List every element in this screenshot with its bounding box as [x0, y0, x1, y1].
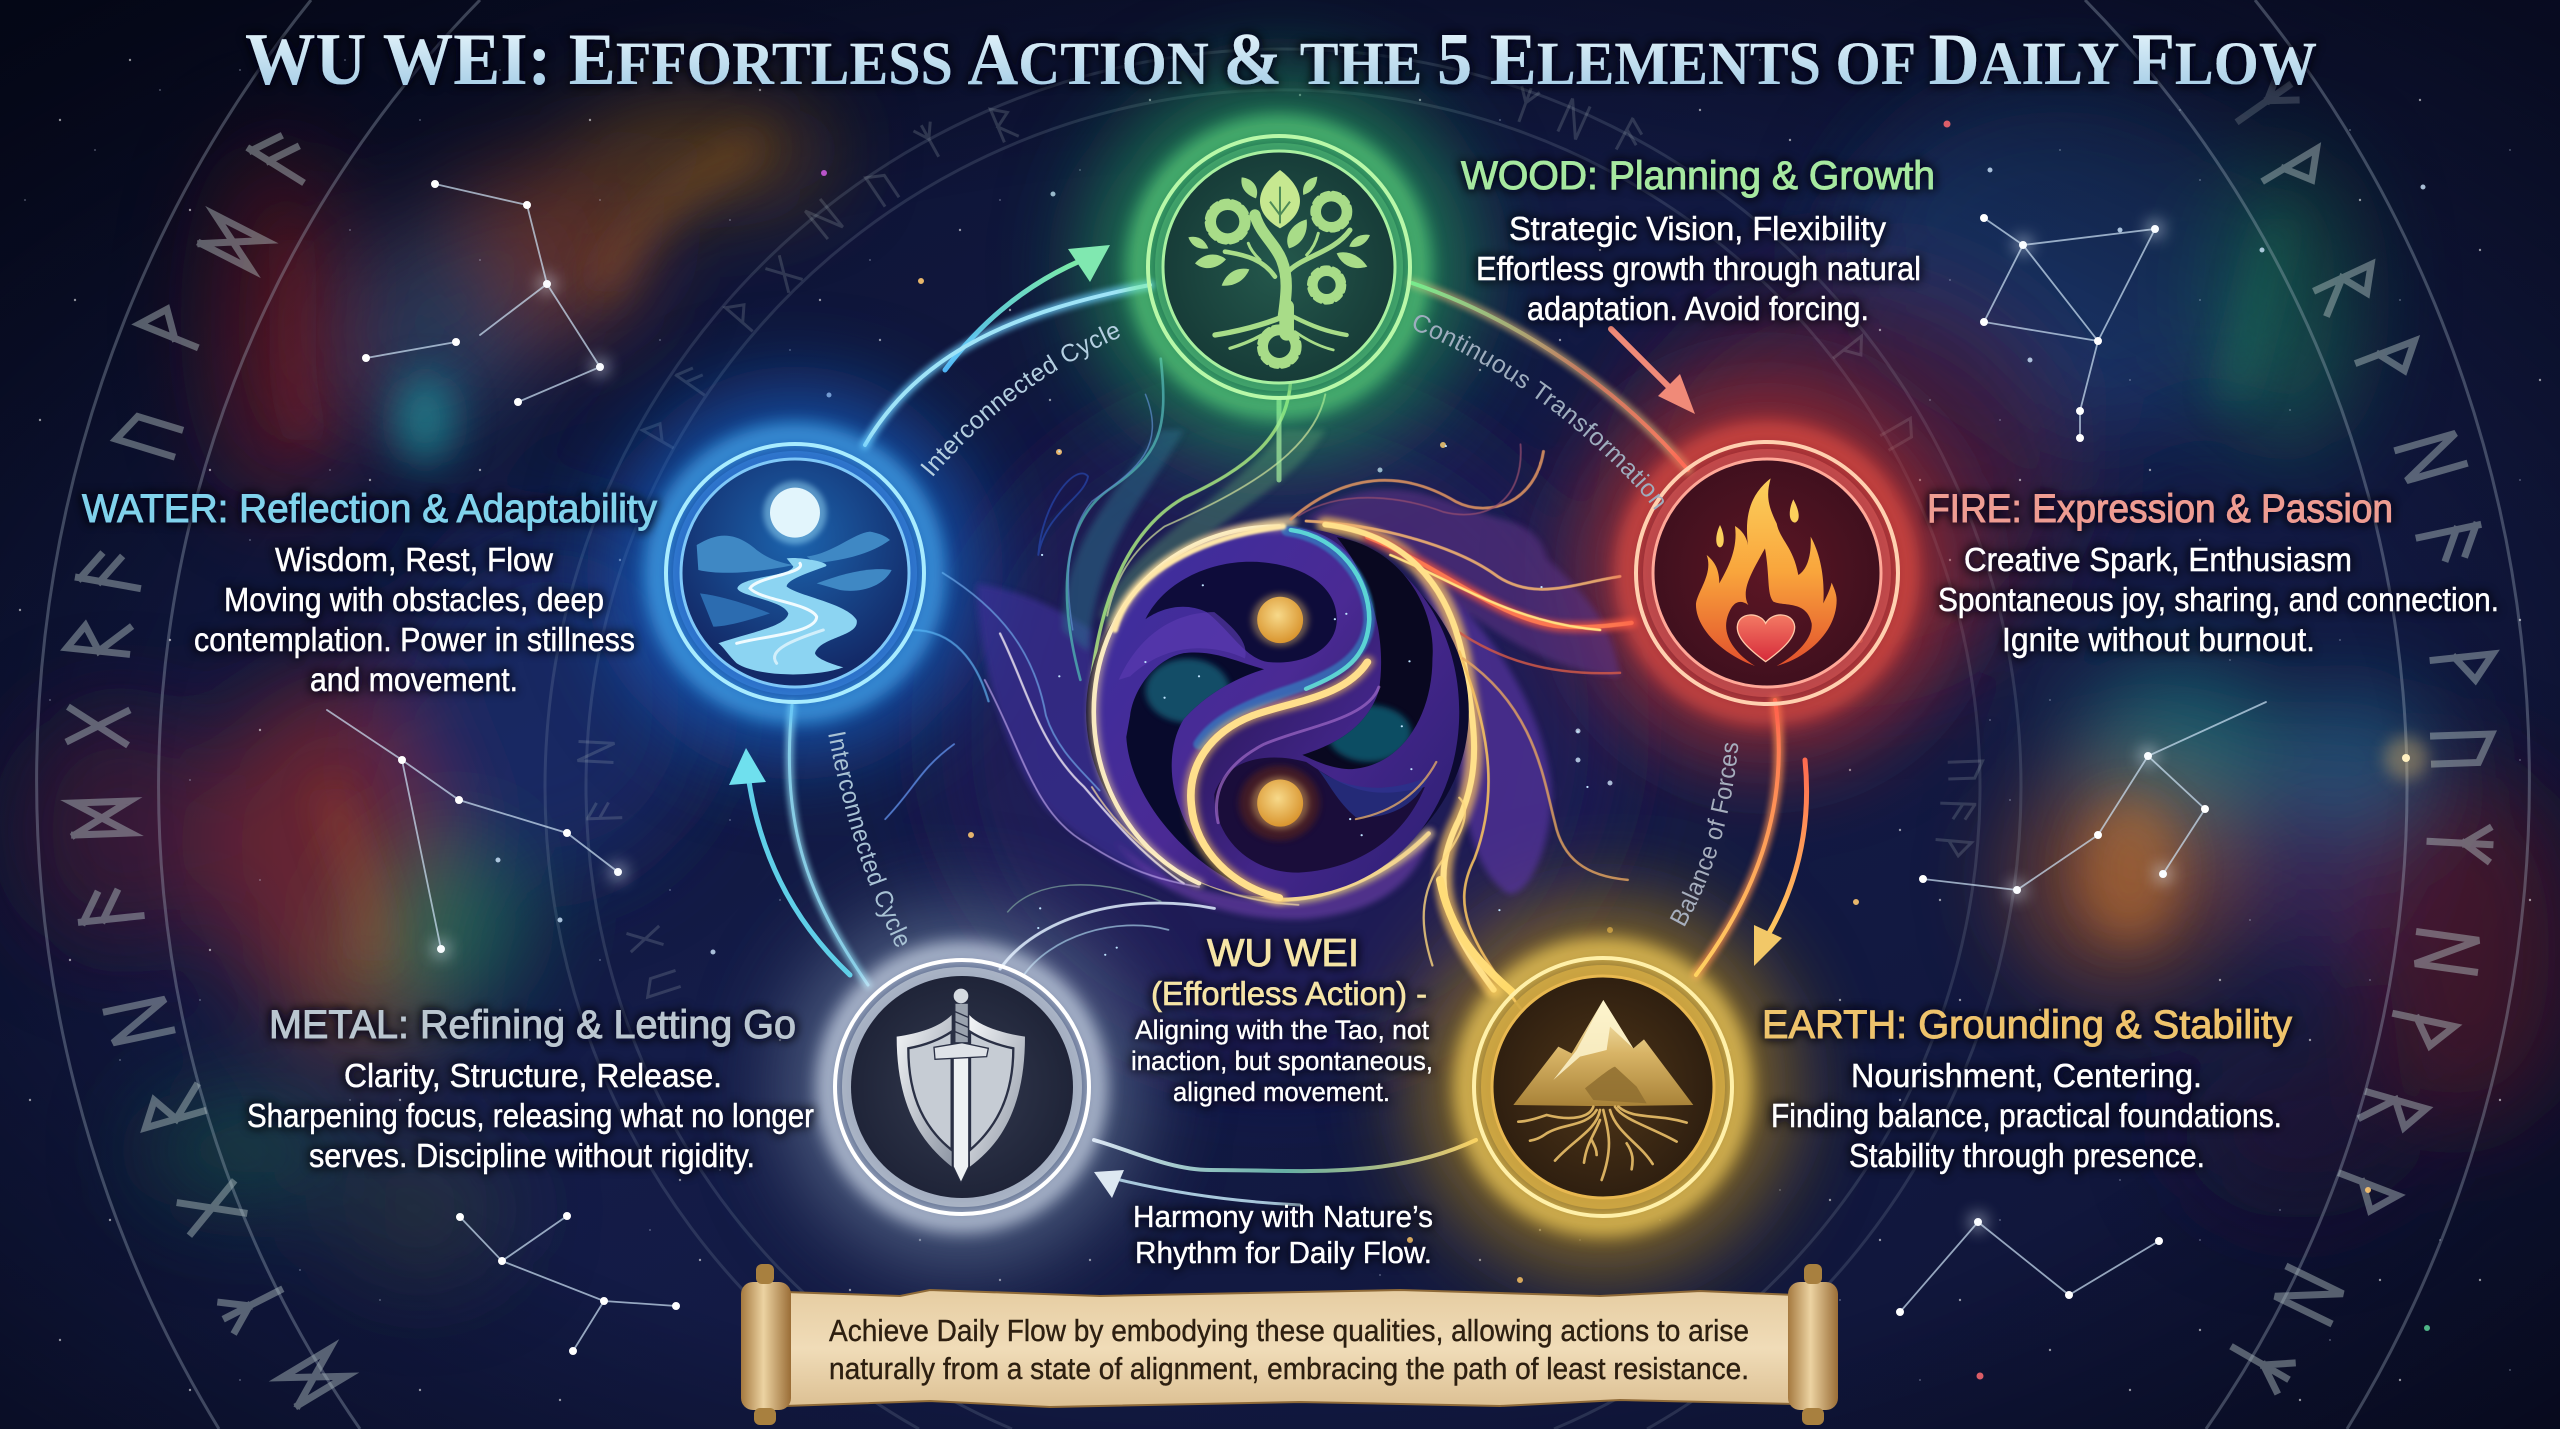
icon: tree with gears [1188, 170, 1370, 367]
dark space in left lobe [1126, 652, 1264, 887]
panel: metal: Sharpening focus, releasing what no longer [247, 1097, 814, 1134]
yin yang center symbol [1038, 446, 1587, 955]
scroll paper [785, 1290, 1795, 1407]
panel: wu wei center text: aligned movement. [1173, 1077, 1390, 1107]
panel: water: Moving with obstacles, deep [224, 581, 604, 618]
panel: fire [1927, 487, 2499, 658]
curved label: Interconnected Cycle upper [920, 260, 1270, 476]
icon: moon and river [697, 481, 892, 674]
panel: wu wei center text: inaction, but spontaneous, [1131, 1046, 1433, 1076]
element: metal circle with shield and sword icon [828, 953, 1096, 1221]
scroll text [829, 1313, 1749, 1386]
cyan and gold swirl bands [1094, 526, 1436, 898]
panel: metal: Clarity, Structure, Release. [344, 1057, 722, 1094]
left scroll roll [741, 1264, 791, 1425]
curved label: Continuous Transformation: Continuous Transformation [1414, 315, 1664, 510]
dark space in right lobe [1302, 537, 1433, 769]
right scroll roll [1788, 1264, 1838, 1425]
icon: shield and sword [897, 989, 1025, 1183]
lower gold dot [1252, 777, 1308, 829]
panel: water: and movement. [310, 661, 518, 698]
panel: water [82, 487, 657, 698]
cycle arrow: metal to water [729, 748, 850, 975]
panel: fire: Spontaneous joy, sharing, and connection. [1938, 581, 2499, 618]
panel: earth: Finding balance, practical foundations. [1771, 1097, 2282, 1134]
panel: wu wei center text [1131, 932, 1433, 1107]
gold glow under strands [1096, 521, 1631, 990]
scroll text: Achieve Daily Flow by embodying these qualities, allowing actions to arise [829, 1313, 1749, 1348]
curved label: Interconnected Cycle upper: Interconnected Cycle [920, 326, 1120, 476]
right lobe of yin yang [1191, 526, 1459, 898]
panel: earth: Stability through presence. [1849, 1137, 2205, 1174]
cycle arrow: water to wood [945, 245, 1110, 370]
scroll banner [741, 1264, 1838, 1425]
panel: fire: Creative Spark, Enthusiasm [1964, 541, 2352, 578]
element: fire circle with flame and heart icon [1627, 433, 1907, 713]
cycle arrow: wood to fire [1611, 329, 1695, 414]
element: water circle with moon and river icon [657, 435, 933, 711]
dark space around lower dot [1214, 757, 1425, 873]
panel: metal: serves. Discipline without rigidity. [309, 1137, 755, 1174]
panel: wood [1461, 154, 1935, 327]
dark space around upper dot [1145, 562, 1337, 663]
element: wood circle with tree icon [1139, 127, 1419, 407]
panel: wood: Strategic Vision, Flexibility [1509, 210, 1886, 247]
panel: wu wei center text: Aligning with the Tao, not [1135, 1015, 1429, 1045]
harmony caption: Harmony with Nature’s [1133, 1199, 1433, 1234]
title: WU WEI: EFFORTLESS ACTION & THE 5 ELEMENTS OF DAILY FLOW [245, 19, 2317, 101]
panel: fire: FIRE: Expression & Passion [1927, 487, 2393, 531]
panel: earth: Nourishment, Centering. [1851, 1057, 2202, 1094]
panel: wu wei center text: WU WEI [1207, 932, 1359, 975]
panel: metal: METAL: Refining & Letting Go [269, 1003, 796, 1047]
panel: wu wei center text: (Effortless Action) - [1151, 975, 1427, 1012]
icon: flame and heart [1696, 478, 1837, 666]
cycle arrow: earth to metal [1094, 1170, 1300, 1205]
flowing energy strands from center to elements [885, 359, 1631, 1008]
panel: fire: Ignite without burnout. [2002, 621, 2315, 658]
panel: metal [247, 1003, 814, 1174]
cycle arrow: fire to earth [1754, 760, 1807, 966]
element: earth circle with mountain and roots icon [1467, 951, 1739, 1223]
curved label: Interconnected Cycle lower: Interconnected Cycle [828, 732, 908, 947]
panel: wood: Effortless growth through natural [1476, 250, 1921, 287]
harmony caption: Rhythm for Daily Flow. [1135, 1235, 1432, 1270]
panel: earth [1762, 1003, 2292, 1174]
glow halos behind elements [615, 77, 1952, 1272]
icon: mountain and roots [1513, 1000, 1693, 1180]
upper gold dot [1252, 594, 1308, 646]
panel: wood: adaptation. Avoid forcing. [1527, 290, 1869, 327]
panel: water: Wisdom, Rest, Flow [275, 541, 553, 578]
panel: water: WATER: Reflection & Adaptability [82, 487, 657, 531]
scroll text: naturally from a state of alignment, embracing the path of least resistance. [829, 1351, 1749, 1386]
harmony caption [1133, 1199, 1433, 1270]
panel: water: contemplation. Power in stillness [194, 621, 635, 658]
connecting energy lines between elements [789, 283, 1779, 1171]
panel: wood: WOOD: Planning & Growth [1461, 154, 1935, 198]
inner sparkles [1038, 446, 1587, 955]
curved label: Balance of Forces: Balance of Forces [1670, 742, 1738, 926]
panel: earth: EARTH: Grounding & Stability [1762, 1003, 2292, 1047]
left lobe of yin yang [1094, 526, 1370, 898]
